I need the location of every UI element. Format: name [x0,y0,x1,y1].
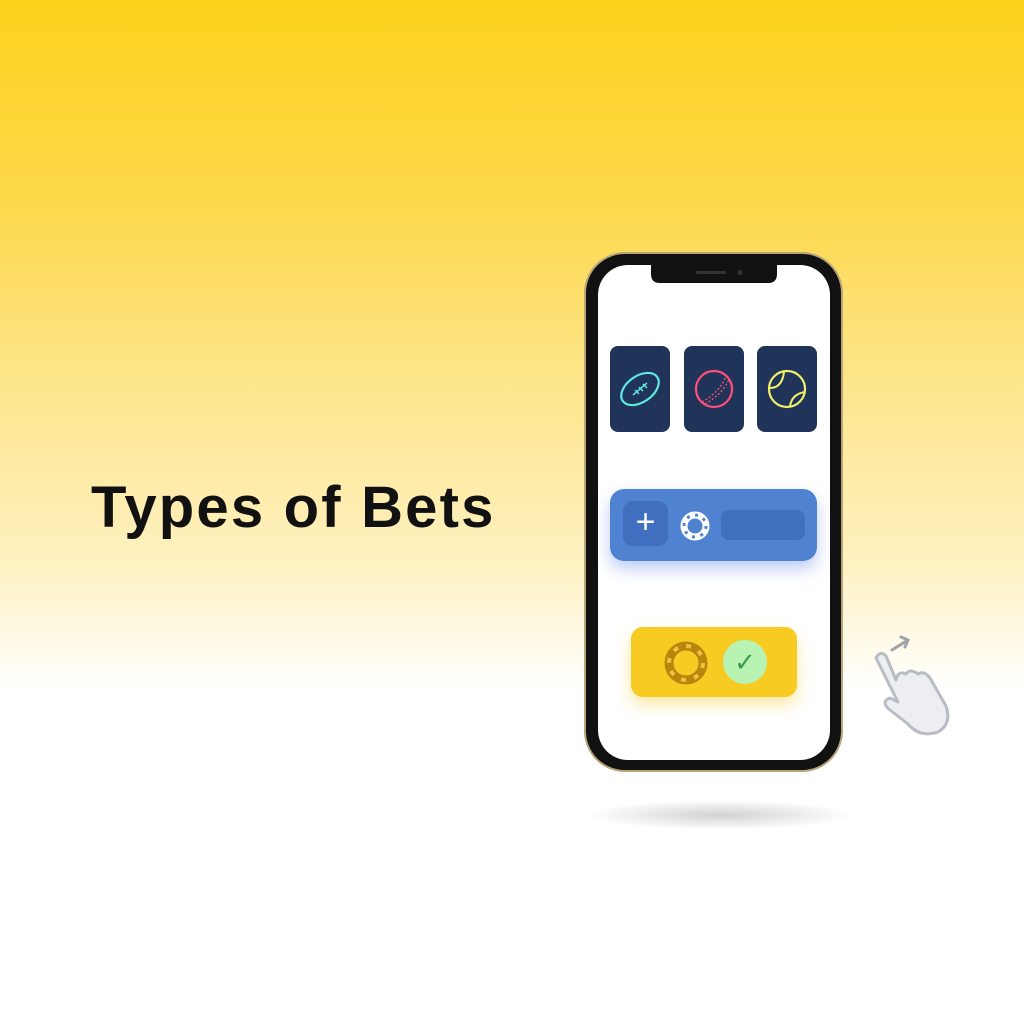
sport cards [610,346,817,432]
check button [723,640,767,684]
blue bet bar [610,489,817,561]
plus button [623,501,668,546]
check button: ✓ [734,647,756,677]
card: cricket [684,346,744,432]
card: football [610,346,670,432]
phone [584,252,843,772]
icon: swipe hand [874,636,950,736]
phone shadow [585,800,855,830]
title: Types of Bets [91,475,496,540]
chip icon [664,642,708,684]
yellow confirm bar [631,627,797,697]
card: tennis [757,346,817,432]
plus button: + [636,503,655,541]
input field [721,510,805,540]
chip icon [680,512,710,540]
